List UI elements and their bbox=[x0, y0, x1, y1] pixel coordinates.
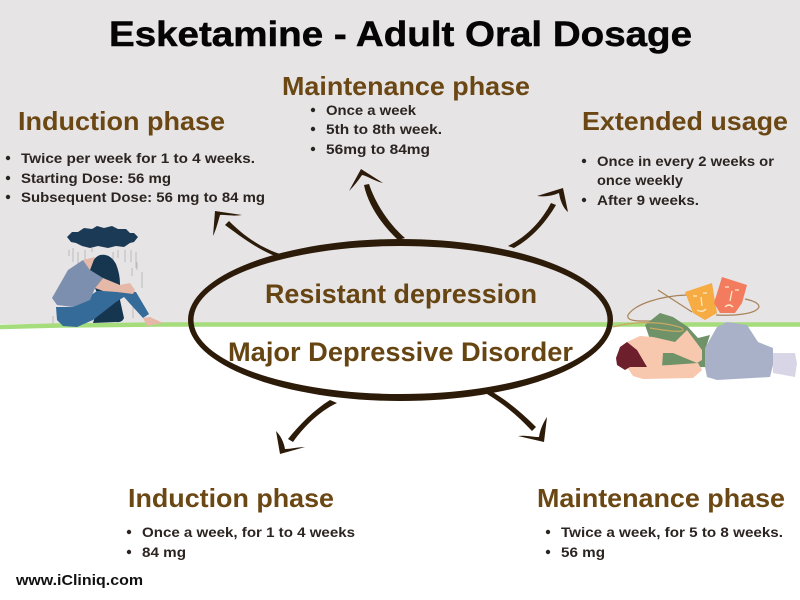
shirt bbox=[52, 260, 103, 307]
bullet list: maintenance phase: 56 mg bbox=[561, 545, 605, 560]
ground line bbox=[0, 324, 800, 327]
bullet list: induction phase bbox=[6, 151, 265, 205]
heading: extended usage: Extended usage bbox=[582, 106, 788, 136]
background: upper grey panel bbox=[0, 0, 800, 324]
bullet list: extended usage: Once in every 2 weeks or bbox=[597, 154, 775, 169]
heading: maintenance phase: Maintenance phase bbox=[537, 483, 785, 513]
upper arm and head skin bbox=[627, 330, 702, 367]
panel: induction phase top bbox=[6, 106, 265, 205]
lower arm bbox=[627, 363, 702, 379]
bullet list: induction phase: 84 mg bbox=[142, 545, 186, 560]
heading: maintenance phase: Maintenance phase bbox=[282, 71, 530, 101]
panel: maintenance phase bottom bbox=[537, 483, 785, 560]
pants bbox=[705, 322, 773, 380]
socks bbox=[773, 353, 797, 377]
central ellipse with text bbox=[188, 239, 613, 401]
bullet list: induction phase: Starting Dose: 56 mg bbox=[21, 171, 171, 186]
heading: induction phase: Induction phase bbox=[128, 483, 334, 513]
bullet list: maintenance phase: Once a week bbox=[326, 103, 417, 118]
bullet list: extended usage: once weekly bbox=[597, 173, 684, 188]
hair bbox=[90, 255, 124, 323]
arrow: to extended usage bbox=[508, 188, 568, 248]
mask: sad red bbox=[714, 277, 747, 313]
bullet list: induction phase: Subsequent Dose: 56 mg to 84 mg bbox=[21, 190, 265, 205]
center text: major depressive disorder: Major Depressive Disorder bbox=[228, 337, 573, 367]
heading: induction phase: Induction phase bbox=[18, 106, 225, 136]
bullet list: maintenance phase bbox=[311, 103, 442, 157]
arrow: to maintenance phase top bbox=[349, 169, 405, 240]
icon: man lying down with masks bbox=[613, 277, 797, 380]
arrow: to maintenance phase bottom bbox=[487, 391, 547, 442]
source URL: www.iCliniq.com bbox=[15, 572, 143, 589]
panel: induction phase bottom bbox=[127, 483, 355, 560]
bullet list: maintenance phase: 56mg to 84mg bbox=[326, 142, 430, 157]
lower ribbon bbox=[613, 323, 683, 331]
hand-drawn ellipse bbox=[188, 239, 613, 401]
ribbon orbit bbox=[628, 290, 759, 321]
cloud bbox=[67, 226, 138, 248]
shirt bbox=[645, 313, 710, 368]
arm skin bbox=[95, 278, 135, 294]
mask faces bbox=[693, 287, 739, 311]
bullet list: induction phase: Once a week, for 1 to 4 weeks bbox=[142, 525, 355, 540]
title: Esketamine - Adult Oral Dosage bbox=[109, 15, 692, 54]
mask: happy orange bbox=[685, 283, 717, 320]
bullet list: maintenance phase: 5th to 8th week. bbox=[326, 122, 442, 137]
panel: extended usage bbox=[582, 106, 788, 208]
arrow: to induction phase top bbox=[213, 211, 283, 258]
bullet list: extended usage bbox=[582, 154, 775, 208]
bullet list: induction phase: Twice per week for 1 to 4 weeks. bbox=[21, 151, 255, 166]
center text: resistant depression: Resistant depression bbox=[265, 279, 537, 309]
arrow: to induction phase bottom bbox=[276, 400, 337, 454]
jeans bbox=[56, 291, 149, 327]
bullet list: induction phase bbox=[127, 525, 355, 560]
foot bbox=[143, 317, 163, 326]
bullet list: maintenance phase: Twice a week, for 5 to 8 weeks. bbox=[561, 525, 783, 540]
panel: maintenance phase top bbox=[282, 71, 530, 157]
bullet list: maintenance phase bbox=[546, 525, 783, 560]
neck bbox=[83, 257, 95, 270]
bullet list: extended usage: After 9 weeks. bbox=[597, 193, 699, 208]
icon: sad woman under rain cloud bbox=[52, 226, 163, 327]
hair bbox=[616, 342, 647, 370]
